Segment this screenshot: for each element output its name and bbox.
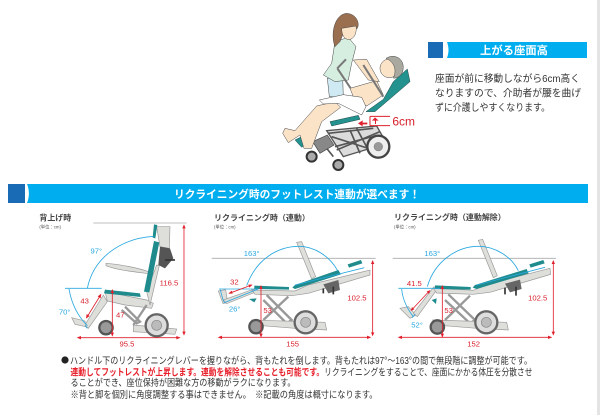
- diagram: reclining linked: [212, 212, 376, 348]
- nurse: [323, 13, 358, 97]
- dimension labels: 53: [444, 306, 453, 315]
- angle labels: 97°: [91, 246, 102, 255]
- angle labels: 52°: [411, 320, 423, 329]
- text block: seat height description: 座面が前に移動しながら6cm高く: [435, 72, 580, 85]
- heading banner: seat height: [428, 42, 587, 58]
- illustration: nurse helping reclined patient with 6cm seat rise: [283, 13, 415, 170]
- diagram title: 背上げ時: [39, 213, 71, 223]
- diagram: backrest raised: [39, 213, 187, 348]
- angle labels: 70°: [59, 308, 70, 317]
- dimension labels: 102.5: [528, 294, 547, 303]
- red dimension arrows: [78, 226, 184, 338]
- patient: [283, 56, 403, 148]
- 6cm rise arrow label: 6cm: [392, 115, 415, 129]
- text block: seat height description: ずに介護しやすくなります。: [435, 101, 550, 114]
- heading banner: seat height: 上がる座面高: [480, 43, 548, 57]
- dimension labels: 95.5: [120, 339, 134, 348]
- heading banner: reclining footrest: リクライニング時のフットレスト連動が選べます！: [174, 187, 420, 201]
- teal seat and backrest: [295, 69, 410, 147]
- angle labels: [229, 249, 260, 314]
- text block: seat height description: [435, 72, 581, 114]
- text block: notes: ることができ、座位保持が困難な方の移動がラクになります。: [70, 376, 296, 389]
- diagram: reclining unlinked: (単位：cm): [394, 223, 416, 230]
- blue angle arcs: [219, 246, 364, 303]
- 6cm rise arrow label: [358, 115, 415, 129]
- angle labels: 163°: [244, 249, 260, 258]
- dimension labels: 43: [80, 297, 89, 306]
- chair: [218, 242, 370, 333]
- red dimension arrows: [219, 262, 373, 337]
- diagram: reclining linked: (単位：cm): [214, 223, 236, 230]
- red dimension arrows: [399, 262, 553, 337]
- dimension labels: 53: [263, 306, 272, 315]
- heading banner: reclining footrest: [8, 184, 588, 203]
- angle labels: [411, 249, 440, 329]
- dimension labels: [407, 279, 547, 349]
- angle labels: 26°: [229, 305, 240, 314]
- dimension labels: [80, 278, 178, 348]
- nurse's frame handles: [337, 59, 383, 97]
- blue angle arcs: [65, 236, 154, 328]
- text block: notes: ※背と脚を個別に角度調整する事はできません。 ※記載の角度は概寸になります。: [70, 388, 378, 401]
- text block: notes: 連動してフットレストが上昇します。連動を解除させることも可能です。リクライニングをすることで、座面にかかる体圧を分散させ: [70, 366, 532, 378]
- diagram: backrest raised: (単位：cm): [39, 223, 62, 230]
- diagram title: リクライニング時（連動）: [214, 212, 310, 222]
- chair: [400, 239, 551, 334]
- bullet: [61, 356, 69, 364]
- chair: [72, 224, 177, 336]
- text block: seat height description: なりますので、介助者が腰を曲げ: [435, 86, 581, 100]
- dimension labels: 32: [230, 278, 239, 287]
- wheelchair frame and wheels: [307, 126, 389, 170]
- dimension labels: 102.5: [347, 294, 367, 303]
- dimension labels: 47: [116, 310, 125, 319]
- diagram: reclining unlinked: [393, 212, 556, 349]
- dimension labels: 116.5: [160, 278, 178, 287]
- angle labels: [59, 246, 102, 317]
- dimension labels: 155: [286, 339, 299, 348]
- dimension labels: 152: [467, 340, 480, 349]
- dimension labels: 41.5: [407, 279, 422, 288]
- diagram title: リクライニング時（連動解除）: [394, 212, 506, 222]
- angle labels: 163°: [424, 249, 440, 258]
- text block: notes: [61, 354, 533, 401]
- blue angle arcs: [398, 246, 545, 318]
- dimension labels: [230, 278, 367, 348]
